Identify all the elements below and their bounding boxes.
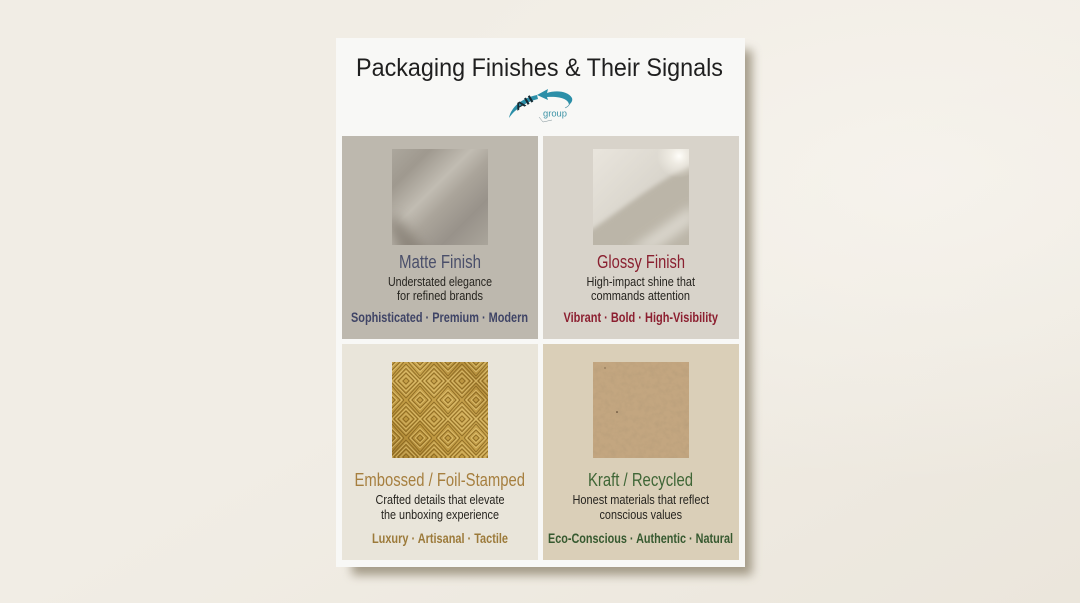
embossed signals: Luxury · Artisanal · Tactile — [372, 530, 508, 546]
glossy description — [586, 274, 695, 303]
panel: kraft / recycled — [543, 344, 739, 560]
glossy heading: Glossy Finish — [597, 252, 685, 272]
infographic canvas — [336, 38, 760, 584]
matte signals: Sophisticated · Premium · Modern — [351, 309, 528, 325]
panel: glossy finish — [543, 134, 739, 339]
title: Packaging Finishes & Their Signals — [356, 54, 723, 82]
kraft description — [572, 492, 709, 522]
embossed description: the unboxing experience — [381, 507, 499, 522]
matte description — [388, 274, 492, 303]
glossy signals: Vibrant · Bold · High-Visibility — [564, 309, 718, 325]
matte swatch — [392, 149, 488, 245]
matte description: for refined brands — [397, 288, 483, 303]
poster sheet — [336, 38, 745, 567]
embossed heading: Embossed / Foil-Stamped — [354, 470, 525, 490]
kraft swatch — [593, 362, 689, 458]
logo: All group swoosh: All — [513, 94, 536, 114]
glossy description: commands attention — [591, 288, 690, 303]
kraft signals: Eco-Conscious · Authentic · Natural — [548, 530, 733, 546]
logo: All group swoosh: group — [543, 108, 567, 118]
kraft heading: Kraft / Recycled — [588, 470, 693, 490]
kraft description: conscious values — [600, 507, 682, 522]
panel: embossed / foil-stamped — [342, 344, 538, 560]
glossy description: High-impact shine that — [586, 274, 695, 289]
panel: matte finish — [342, 136, 538, 339]
matte description: Understated elegance — [388, 274, 492, 289]
foil swatch — [392, 362, 488, 458]
matte heading: Matte Finish — [399, 252, 481, 272]
page shadow — [352, 50, 752, 575]
embossed description: Crafted details that elevate — [376, 492, 504, 507]
kraft description: Honest materials that reflect — [572, 492, 709, 507]
glossy swatch — [593, 149, 689, 245]
logo: All group swoosh — [509, 89, 572, 122]
embossed description — [376, 492, 504, 522]
